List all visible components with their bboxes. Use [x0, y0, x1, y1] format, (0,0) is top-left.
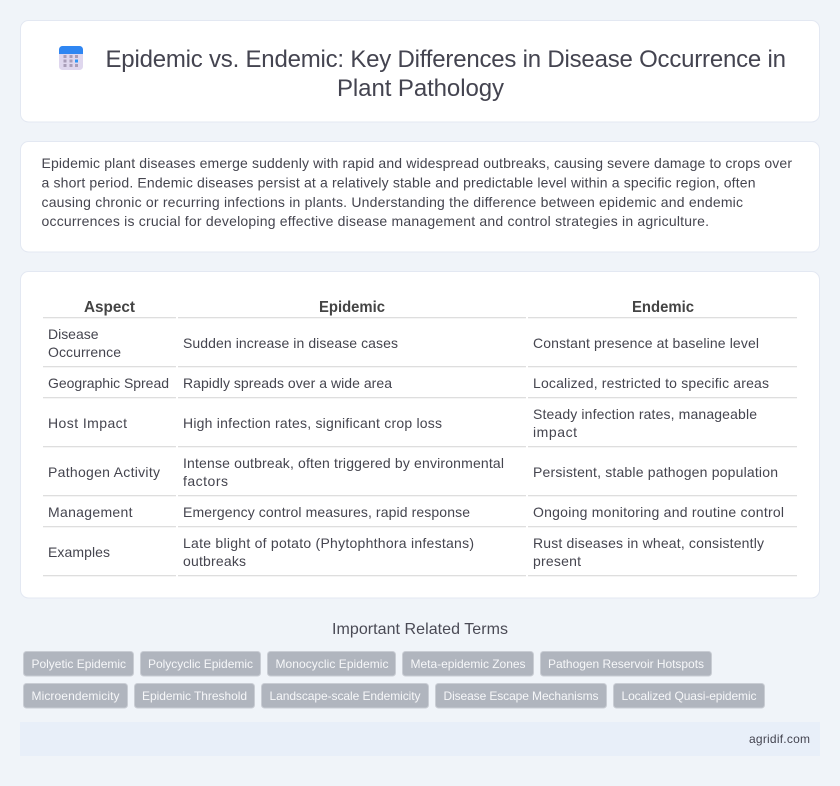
- panel: introduction: [20, 142, 820, 252]
- row: management: Management: [48, 504, 133, 520]
- footer: agridif.com: [749, 732, 810, 746]
- related term chips: [24, 652, 764, 708]
- chip: Pathogen Reservoir Hotspots: Pathogen Reservoir Hotspots: [548, 657, 704, 671]
- row: host impact: Host Impact: [48, 415, 127, 431]
- chip: Microendemicity: [24, 684, 128, 708]
- title: Plant Pathology: [337, 75, 504, 102]
- row: management: [43, 504, 797, 527]
- row: disease occurrence: Constant presence at baseline level: [533, 335, 759, 351]
- chip: Localized Quasi-epidemic: [614, 684, 764, 708]
- chip: Monocyclic Epidemic: [268, 652, 396, 676]
- chip: Pathogen Reservoir Hotspots: [540, 652, 712, 676]
- row: disease occurrence: Disease: [48, 326, 99, 342]
- chip: Disease Escape Mechanisms: [436, 684, 606, 708]
- row: geographic spread: Rapidly spreads over a wide area: [183, 375, 392, 391]
- text block: introduction: occurrences is crucial for developing effective disease management and control strategies in agriculture.: [42, 213, 709, 229]
- heading: important related terms: Important Related Terms: [332, 621, 508, 638]
- row: examples: Rust diseases in wheat, consistently: [533, 535, 764, 551]
- chip: Polyetic Epidemic: [24, 652, 134, 676]
- chip: Epidemic Threshold: Epidemic Threshold: [142, 689, 247, 703]
- row: pathogen activity: Persistent, stable pathogen population: [533, 464, 778, 480]
- chip: Landscape-scale Endemicity: Landscape-scale Endemicity: [270, 689, 420, 703]
- row: geographic spread: [43, 375, 797, 398]
- row: examples: present: [533, 553, 581, 569]
- row: pathogen activity: factors: [183, 473, 228, 489]
- table header: Epidemic: [319, 299, 385, 316]
- row: geographic spread: Geographic Spread: [48, 375, 169, 391]
- chip: Polycyclic Epidemic: Polycyclic Epidemic: [148, 657, 253, 671]
- row: management: Ongoing monitoring and routine control: [533, 504, 784, 520]
- row: host impact: [43, 406, 797, 447]
- chip: Polyetic Epidemic: Polyetic Epidemic: [32, 657, 126, 671]
- chip: Meta-epidemic Zones: [402, 652, 534, 676]
- row: host impact: Steady infection rates, manageable: [533, 406, 757, 422]
- text block: introduction: causing chronic or recurring infections in plants. Understanding the difference between epidemic and endemic: [42, 194, 743, 210]
- chip: Disease Escape Mechanisms: Disease Escape Mechanisms: [444, 689, 598, 703]
- row: pathogen activity: Intense outbreak, often triggered by environmental: [183, 455, 504, 471]
- row: examples: Examples: [48, 544, 110, 560]
- row: geographic spread: Localized, restricted to specific areas: [533, 375, 769, 391]
- text block: introduction: [42, 155, 792, 229]
- chip: Localized Quasi-epidemic: Localized Quasi-epidemic: [622, 689, 756, 703]
- row: disease occurrence: Sudden increase in disease cases: [183, 335, 398, 351]
- text block: introduction: Epidemic plant diseases emerge suddenly with rapid and widespread outbreaks, causing severe damage to crops over: [42, 155, 792, 171]
- title: [106, 46, 786, 102]
- row: examples: Late blight of potato (Phytophthora infestans): [183, 535, 474, 551]
- title: Epidemic vs. Endemic: Key Differences in Disease Occurrence in: [106, 46, 786, 73]
- row: management: Emergency control measures, rapid response: [183, 504, 470, 520]
- text block: introduction: a short period. Endemic diseases persist at a relatively stable and predictable level within a specific region, often: [42, 174, 756, 190]
- row: host impact: High infection rates, significant crop loss: [183, 415, 442, 431]
- row: disease occurrence: [43, 326, 797, 367]
- chip: Monocyclic Epidemic: Monocyclic Epidemic: [276, 657, 388, 671]
- row: pathogen activity: Pathogen Activity: [48, 464, 160, 480]
- footer: [20, 722, 820, 756]
- table header: [43, 299, 797, 318]
- chip: Microendemicity: Microendemicity: [32, 689, 120, 703]
- row: examples: [43, 535, 797, 576]
- icon: calendar: [59, 46, 83, 70]
- table header: Endemic: [632, 299, 694, 316]
- panel: header: [20, 20, 820, 122]
- row: pathogen activity: [43, 455, 797, 496]
- row: disease occurrence: Occurrence: [48, 344, 121, 360]
- row: host impact: impact: [533, 424, 577, 440]
- chip: Meta-epidemic Zones: Meta-epidemic Zones: [410, 657, 526, 671]
- chip: Landscape-scale Endemicity: [262, 684, 428, 708]
- panel: comparison table: [20, 272, 820, 598]
- row: examples: outbreaks: [183, 553, 246, 569]
- chip: Polycyclic Epidemic: [140, 652, 260, 676]
- table header: Aspect: [84, 299, 136, 316]
- chip: Epidemic Threshold: [134, 684, 254, 708]
